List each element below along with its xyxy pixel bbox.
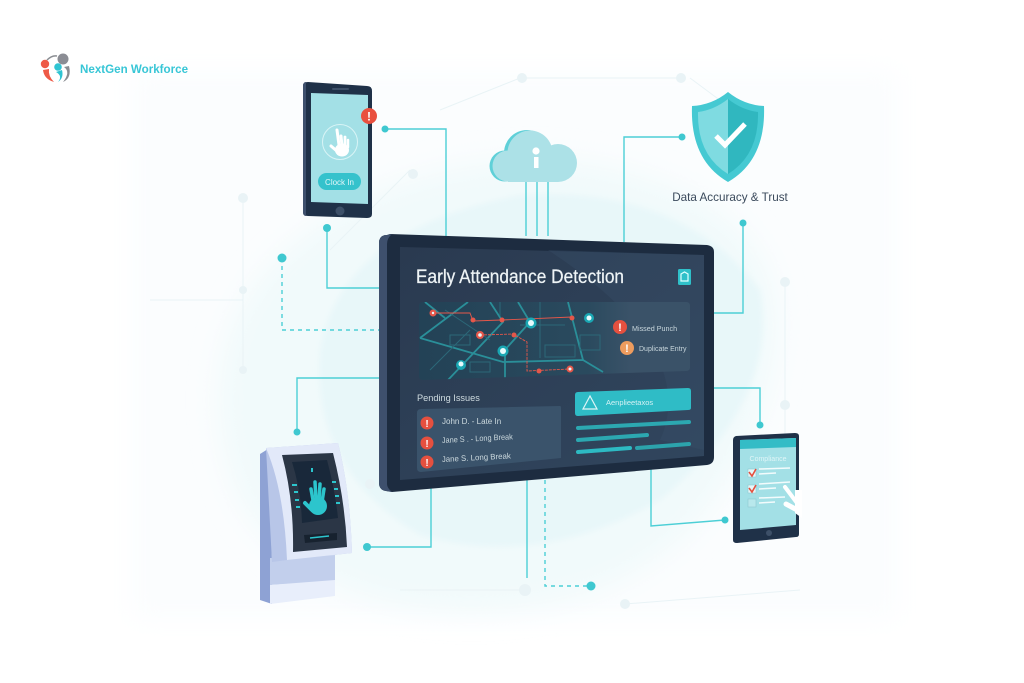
pending issues list: John D. - Late In — [442, 417, 501, 426]
kiosk body — [266, 443, 352, 562]
pointing hand — [785, 487, 802, 518]
display screen — [400, 247, 704, 480]
pending issues list: ! — [425, 419, 429, 430]
shield label: Data Accuracy & Trust — [672, 191, 789, 204]
icon: shield — [692, 92, 764, 182]
kiosk screen — [282, 453, 347, 552]
icon: biometric kiosk — [260, 443, 352, 604]
map roads — [420, 302, 603, 380]
display title: Early Attendance Detection — [416, 267, 624, 288]
map legend: duplicate entry: Duplicate Entry — [639, 346, 687, 353]
faint background network — [150, 73, 800, 609]
pending issues heading: Pending Issues — [417, 393, 480, 403]
logo — [41, 54, 189, 82]
alert button — [575, 388, 691, 416]
pending issues list — [417, 406, 561, 472]
kiosk base — [270, 555, 335, 585]
infographic canvas — [40, 54, 800, 612]
icon: teal badge — [678, 269, 691, 285]
alert button: Aenplieetaxos — [606, 398, 653, 407]
kiosk side — [260, 449, 272, 604]
connector lines — [278, 126, 764, 590]
pending issues list: ! — [425, 439, 429, 450]
alert route — [433, 313, 572, 371]
pending issues list: Jane S . - Long Break — [442, 432, 514, 445]
icon: smartphone — [303, 82, 377, 218]
map legend: duplicate entry — [620, 341, 687, 355]
hand icon — [305, 482, 327, 515]
phone screen — [311, 93, 368, 204]
map panel — [419, 302, 690, 380]
main dashboard display — [379, 234, 714, 492]
pending issues list: ! — [425, 458, 429, 469]
map legend: missed punch: ! — [618, 322, 622, 334]
map legend: duplicate entry: ! — [625, 343, 629, 355]
status bars — [578, 422, 689, 452]
icon: compliance tablet — [733, 433, 802, 543]
map legend: missed punch: Missed Punch — [632, 324, 677, 333]
clock in button: Clock In — [325, 178, 354, 187]
card slot — [304, 533, 337, 543]
fingerprint circle and hand — [322, 124, 358, 160]
logo mark — [41, 54, 70, 82]
icon: cloud — [490, 130, 577, 182]
pending issues list: Jane S. Long Break — [442, 451, 512, 464]
logo wordmark: NextGen Workforce — [80, 63, 189, 76]
tablet heading: Compliance — [750, 456, 787, 463]
alert badge: ! — [367, 110, 371, 124]
checklist — [748, 468, 790, 507]
display bezel — [379, 234, 714, 492]
tablet screen — [740, 438, 796, 530]
map legend: missed punch — [613, 320, 677, 334]
